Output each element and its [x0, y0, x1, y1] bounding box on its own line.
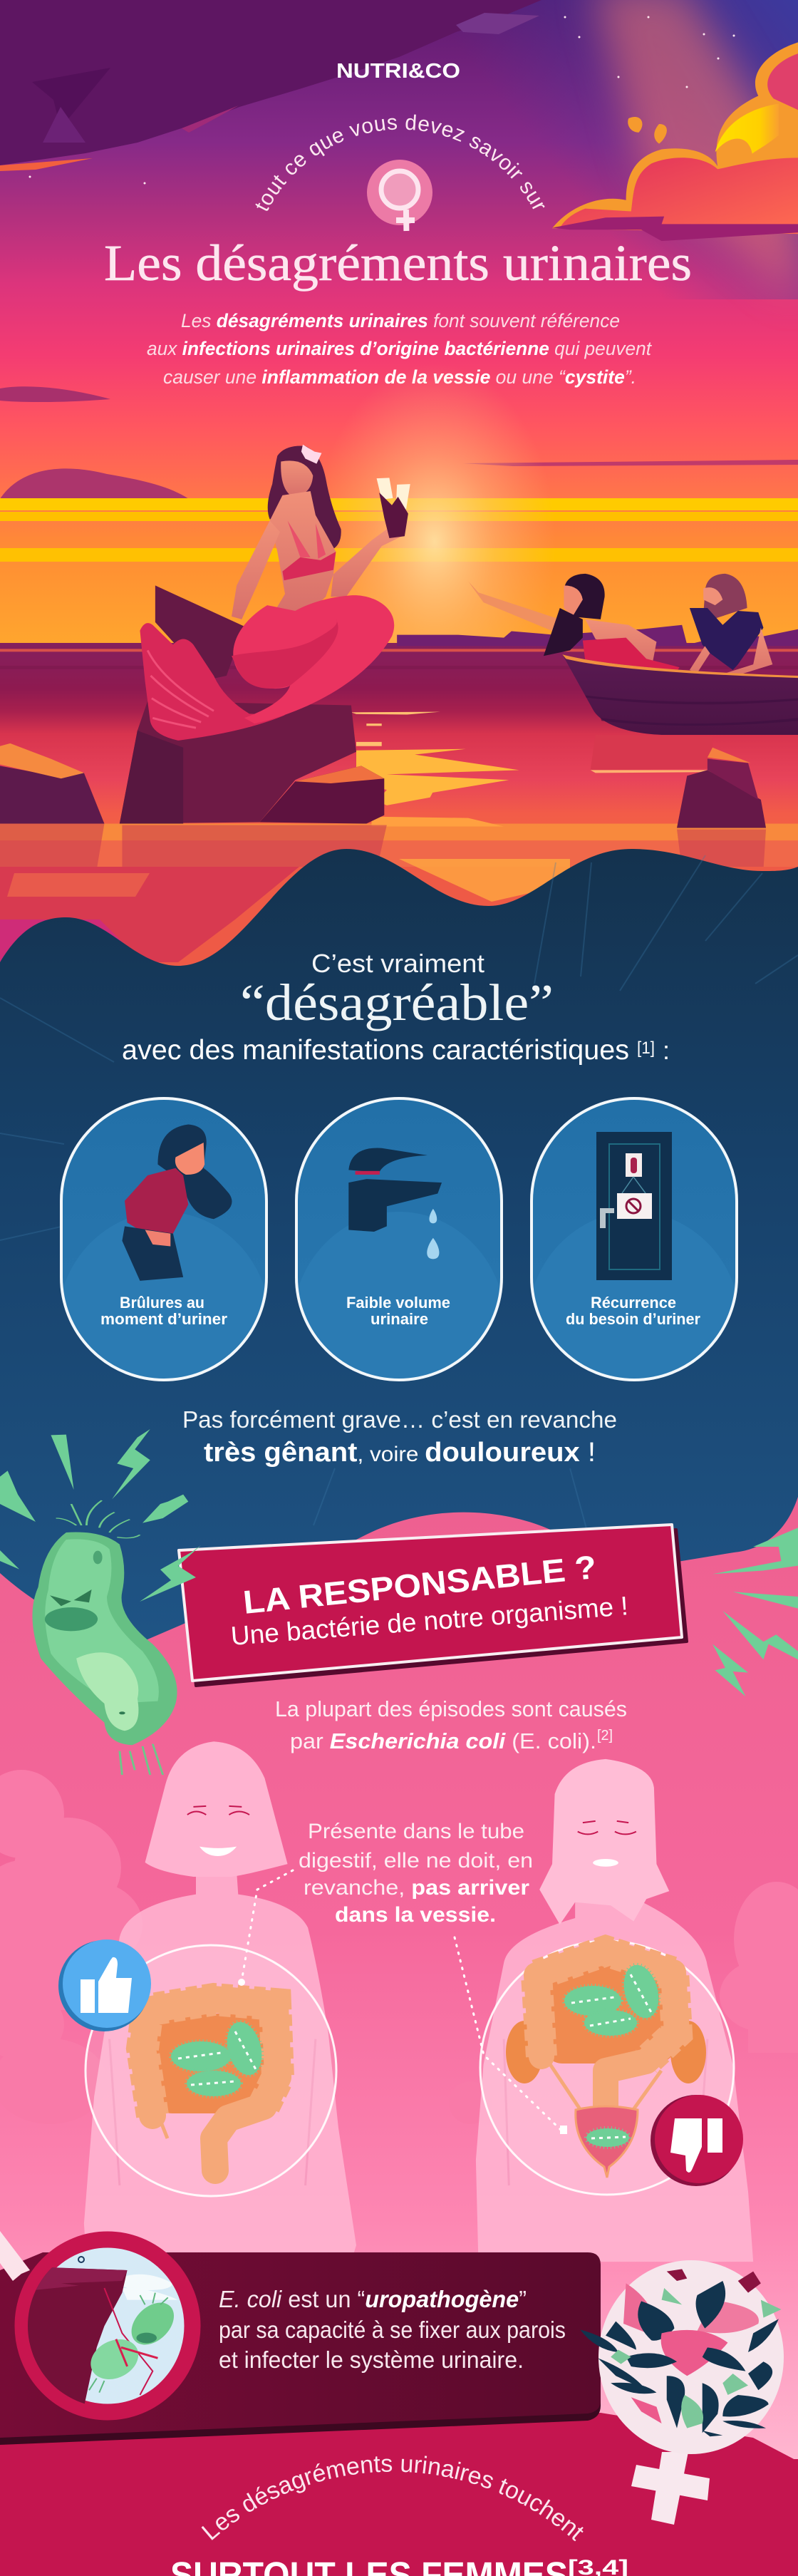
organ: ureters — [547, 2060, 661, 2113]
icon: locked toilet door — [596, 1132, 672, 1280]
icon: dripping tap — [348, 1148, 442, 1259]
logo: NUTRI&CO — [336, 60, 460, 83]
panel: navy wave section — [0, 849, 798, 1639]
illustration: women in boat — [468, 574, 798, 735]
label: Brûlures au — [120, 1294, 204, 1312]
background: sunset sky — [0, 0, 798, 645]
icon: female symbol with bouquet — [580, 2260, 784, 2525]
text: not serious but painful: Pas forcément grave… c’est en revanche — [182, 1406, 617, 1433]
label: Récurrence — [591, 1294, 676, 1312]
text: present in digestive tract: Présente dans le tube — [308, 1820, 524, 1843]
panel: recurring need symptom — [530, 1097, 738, 1381]
text: present in digestive tract: revanche, pas arriver — [304, 1876, 529, 1900]
bacteria clusters — [171, 2018, 267, 2096]
background: blue corner of sky with stars — [28, 0, 798, 299]
icon: magnifier with bacterium climbing — [23, 2240, 192, 2412]
text: e. coli: La plupart des épisodes sont causés — [275, 1696, 627, 1721]
intro text: Les désagréments urinaires font souvent référence — [181, 310, 620, 331]
background: pink clouds — [0, 1770, 798, 2124]
text: e. coli: par Escherichia coli (E. coli). — [290, 1729, 596, 1753]
background: crimson bottom — [0, 2413, 798, 2576]
icon: magnifier handle — [0, 2231, 30, 2281]
panel: la responsable banner: Une bactérie de notre organisme ! — [229, 1591, 629, 1651]
label: du besoin d’uriner — [566, 1310, 700, 1328]
label: Faible volume — [346, 1294, 450, 1312]
label — [566, 1294, 700, 1328]
text: e. coli: [2] — [597, 1728, 613, 1743]
label — [100, 1294, 227, 1328]
organ: intestines — [537, 1951, 677, 2106]
bouquet — [580, 2269, 781, 2436]
label: urinaire — [370, 1310, 428, 1328]
text: e. coli — [275, 1696, 627, 1753]
panel: uropathogen callout — [0, 2252, 601, 2445]
illustration: mermaid — [140, 445, 410, 741]
organ: kidneys — [506, 2021, 706, 2083]
callout text: et infecter le système urinaire. — [219, 2346, 524, 2373]
clouds: dark purple upper left — [0, 0, 542, 171]
water — [0, 643, 798, 871]
intro text — [147, 310, 652, 388]
text: present in digestive tract: digestif, elle ne doit, en — [299, 1849, 533, 1872]
panel: la responsable banner — [140, 1525, 687, 1686]
background: pink section — [0, 1497, 798, 2459]
text: not serious but painful: très gênant , voire douloureux ! — [204, 1438, 596, 1468]
water: lower reflection bands — [0, 859, 798, 974]
callout text — [219, 2286, 566, 2373]
circle: gut zoom — [86, 1945, 336, 2196]
text: present in digestive tract: dans la vessie. — [335, 1903, 496, 1927]
organ: bladder — [576, 2106, 638, 2178]
heading: manifestations: : — [663, 1036, 670, 1065]
label — [346, 1294, 450, 1328]
panel: burning symptom — [60, 1097, 268, 1381]
panel: low volume symptom — [295, 1097, 503, 1381]
icon: female symbol — [367, 160, 432, 231]
icon: bolt over banner — [140, 1545, 201, 1602]
icon: woman in pain — [122, 1125, 232, 1281]
illustration: woman with infected bladder — [476, 1759, 753, 2262]
heading: manifestations — [122, 949, 670, 1066]
organ: intestines — [142, 1999, 279, 2170]
sun glow and horizon bands — [0, 364, 798, 720]
icon: thumbs up — [58, 1939, 151, 2031]
text: not serious but painful — [182, 1406, 617, 1468]
illustration: woman with healthy gut — [84, 1741, 356, 2262]
decorative light streaks — [0, 855, 798, 1547]
heading: manifestations: “désagréable” — [240, 974, 554, 1031]
heading: manifestations: C’est vraiment — [311, 949, 484, 978]
curved heading: tout ce que vous devez savoir sur — [255, 114, 545, 211]
callout text: par sa capacité à se fixer aux parois — [219, 2317, 566, 2343]
curved heading: women: Les désagréments urinaires touchent — [201, 2456, 584, 2542]
bacteria clusters — [564, 1961, 664, 2147]
water: horizon line and reflections — [0, 625, 798, 872]
panel: la responsable banner: LA RESPONSABLE ? — [242, 1548, 598, 1621]
cloud: orange and yellow upper right — [552, 42, 798, 241]
title: Les désagréments urinaires — [104, 235, 692, 292]
rocks — [0, 585, 766, 828]
text: present in digestive tract — [299, 1820, 533, 1927]
intro text: aux infections urinaires d’origine bactérienne qui peuvent — [147, 338, 652, 359]
illustration: angry bacterium — [32, 1500, 177, 1775]
icons: lightning bolts — [0, 1429, 798, 1696]
intro text: causer une inflammation de la vessie ou une “cystite”. — [163, 366, 636, 388]
heading: manifestations: avec des manifestations caractéristiques — [122, 1035, 629, 1066]
icon: thumbs down — [651, 2095, 743, 2186]
circle: urinary tract zoom — [480, 1941, 734, 2195]
heading: manifestations: [1] — [637, 1039, 655, 1058]
dotted connector lines — [242, 1870, 562, 2131]
callout text: E. coli est un “uropathogène” — [219, 2286, 527, 2312]
label: moment d’uriner — [100, 1310, 227, 1328]
